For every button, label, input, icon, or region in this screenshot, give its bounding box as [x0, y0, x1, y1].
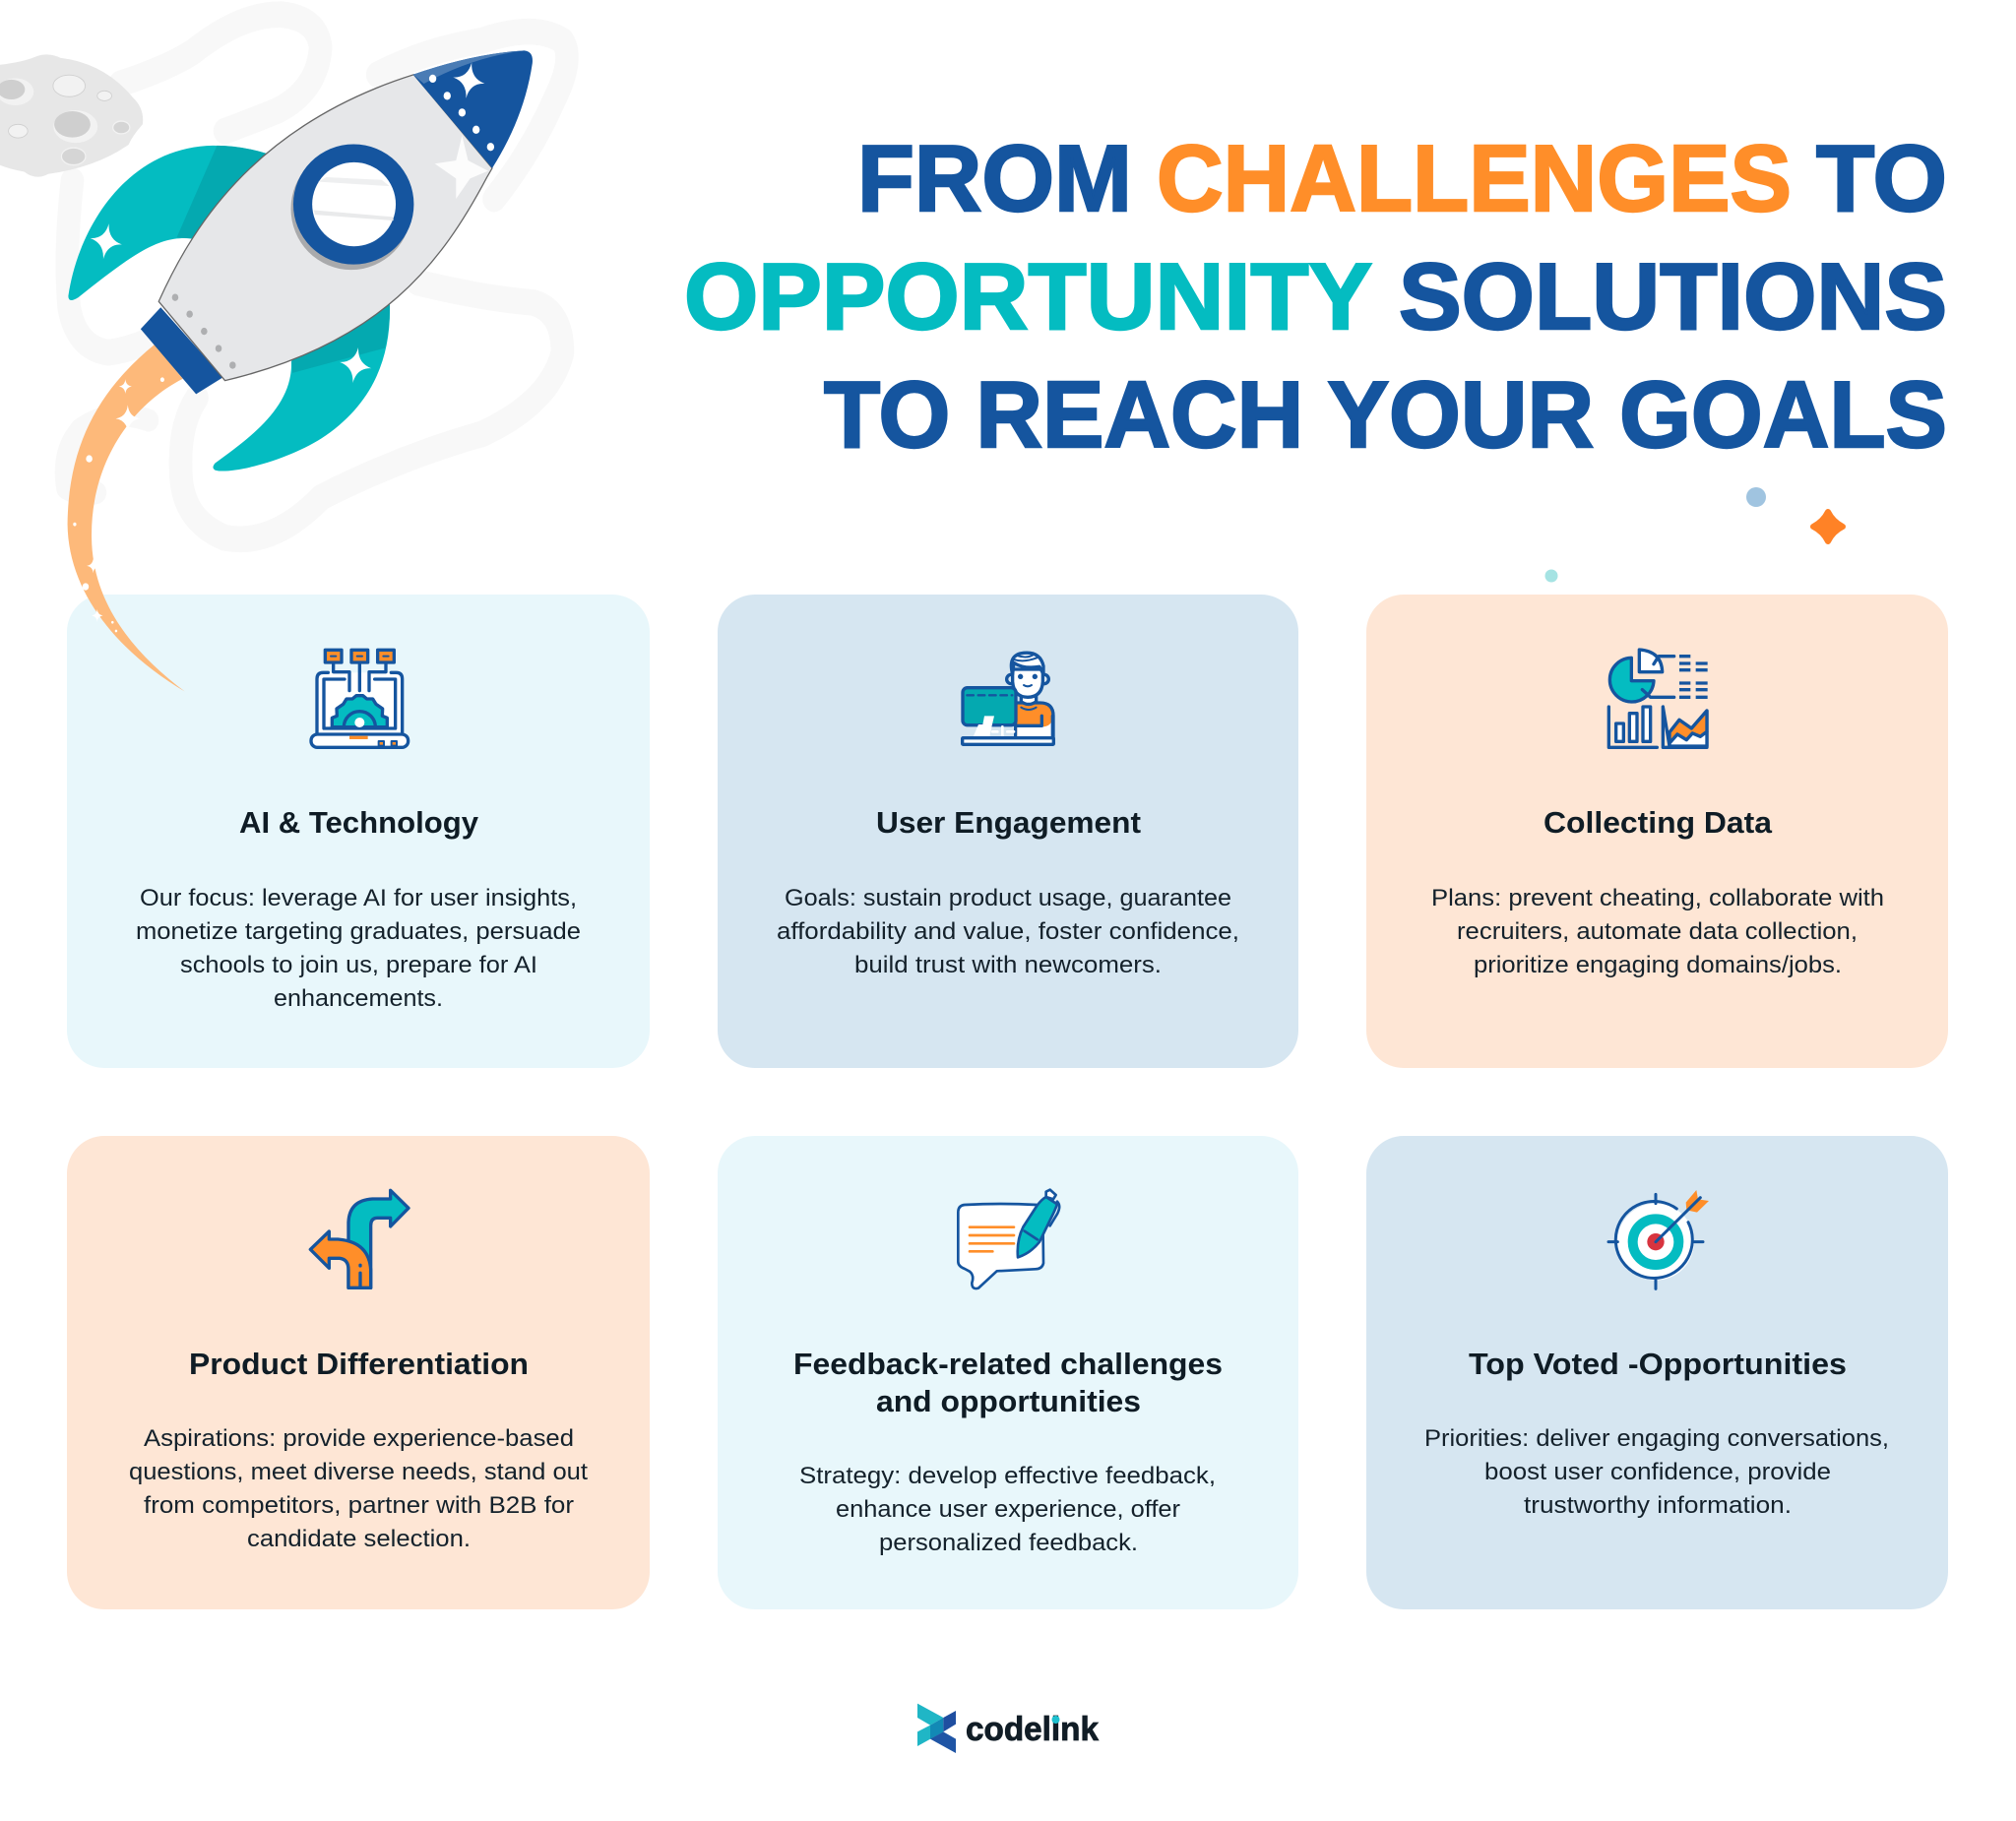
- nozzle: [141, 307, 223, 394]
- body text: recruiters, automate data collection,: [1457, 918, 1858, 945]
- panel: AI and Technology: [67, 595, 650, 1068]
- panel: Product Differentiation: [67, 1136, 650, 1609]
- nose cone: [413, 50, 533, 168]
- panel: Collecting Data: [1366, 595, 1948, 1068]
- logo mark: [917, 1704, 956, 1753]
- body text: Aspirations: provide experience-based: [144, 1425, 574, 1452]
- body text: trustworthy information.: [1524, 1492, 1792, 1519]
- title: [684, 126, 1947, 468]
- icon: diverging arrows: [310, 1190, 409, 1287]
- body text: [799, 1463, 1216, 1556]
- body text: Plans: prevent cheating, collaborate with: [1431, 885, 1884, 911]
- heading: [793, 1347, 1223, 1418]
- panel: Feedback-related challenges: [718, 1136, 1298, 1609]
- logo wordmark: codelink: [966, 1711, 1099, 1748]
- body text: questions, meet diverse needs, stand out: [129, 1459, 588, 1485]
- icon: speech bubble with pen: [958, 1190, 1059, 1288]
- body text: [129, 1425, 588, 1552]
- porthole window: [291, 144, 413, 270]
- lower fin: [213, 303, 390, 471]
- title: FROM: [857, 126, 1132, 231]
- heading: Feedback-related challenges: [793, 1347, 1223, 1381]
- heading: Collecting Data: [1544, 805, 1773, 840]
- body text: Our focus: leverage AI for user insights,: [140, 885, 577, 911]
- background swirl: [65, 15, 567, 539]
- heading: Product Differentiation: [189, 1347, 529, 1381]
- body text: schools to join us, prepare for AI: [180, 952, 537, 978]
- icon: target with arrow: [1608, 1190, 1709, 1288]
- body text: prioritize engaging domains/jobs.: [1474, 952, 1842, 978]
- body text: enhancements.: [274, 985, 443, 1012]
- illustration: rocket with moon and trail: [0, 15, 567, 692]
- body text: personalized feedback.: [879, 1530, 1138, 1556]
- icon: laptop with gear: [311, 650, 409, 747]
- body text: candidate selection.: [247, 1526, 471, 1552]
- body text: [1424, 1425, 1889, 1519]
- heading: AI & Technology: [239, 805, 479, 840]
- body text: Goals: sustain product usage, guarantee: [785, 885, 1231, 911]
- body text: monetize targeting graduates, persuade: [136, 918, 581, 945]
- icon: person at computer: [963, 653, 1053, 744]
- title: TO: [1816, 126, 1947, 231]
- heading: and opportunities: [876, 1384, 1141, 1418]
- title: CHALLENGES: [1157, 126, 1792, 231]
- rocket body: [158, 75, 492, 381]
- body text: build trust with newcomers.: [854, 952, 1162, 978]
- logo: codelink: [917, 1704, 1099, 1753]
- body text: [777, 885, 1239, 978]
- body text: [136, 885, 581, 1012]
- body text: affordability and value, foster confidence,: [777, 918, 1239, 945]
- decorative dots and star: [1545, 487, 1843, 583]
- moon: [0, 54, 143, 177]
- title: OPPORTUNITY: [684, 244, 1372, 349]
- body text: Strategy: develop effective feedback,: [799, 1463, 1216, 1489]
- heading: Top Voted -Opportunities: [1469, 1347, 1847, 1381]
- exhaust flame: [68, 345, 185, 692]
- body text: from competitors, partner with B2B for: [144, 1492, 574, 1519]
- panel: Top Voted Opportunities: [1366, 1136, 1948, 1609]
- body text: [1431, 885, 1884, 978]
- body text: boost user confidence, provide: [1484, 1459, 1831, 1485]
- title: SOLUTIONS: [1399, 244, 1947, 349]
- title: TO REACH YOUR GOALS: [824, 362, 1947, 468]
- upper fin: [68, 146, 267, 300]
- body text: enhance user experience, offer: [836, 1496, 1180, 1523]
- body text: Priorities: deliver engaging conversations,: [1424, 1425, 1889, 1452]
- panel: User Engagement: [718, 595, 1298, 1068]
- heading: User Engagement: [876, 805, 1141, 840]
- icon: charts and data: [1608, 650, 1708, 747]
